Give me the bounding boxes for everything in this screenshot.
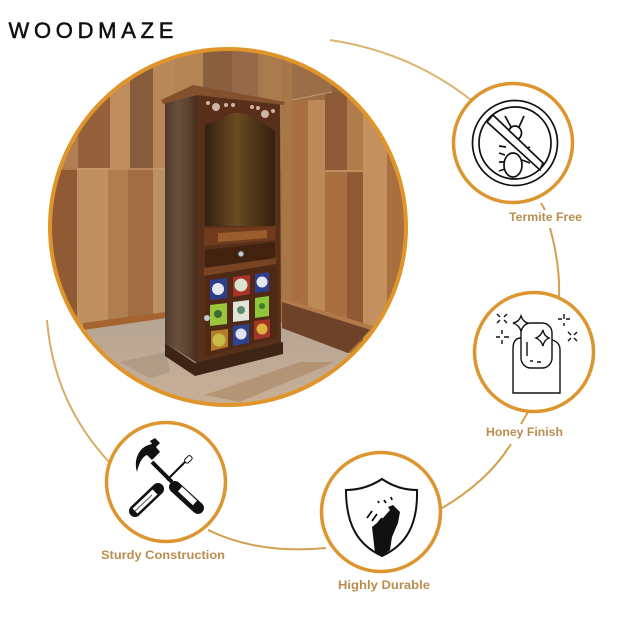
floor streaks [120,352,335,402]
icon: polished nail [496,314,577,393]
base plinth [165,342,283,376]
left wall lower planks [52,168,165,326]
baseboards [83,312,166,330]
photo ring [50,49,406,405]
feature: sturdy construction [101,422,226,562]
screwdriver handle [135,489,158,511]
ring [106,422,226,542]
door [205,264,277,356]
product photo circle [40,47,408,420]
hammer head [136,438,160,472]
icon: shield with fist [346,479,417,556]
right wall planks [62,64,387,342]
drawer niche and knob [205,242,275,270]
feature: honey finish [474,292,594,439]
shelf [204,226,276,246]
niche opening [205,113,275,226]
side panel [165,95,197,363]
title: WOODMAZE [8,18,178,43]
label: Honey Finish [486,427,563,439]
screwdriver shaft [167,460,187,480]
top cornice [161,85,285,105]
ring [454,84,572,202]
tiles [210,272,270,351]
feature: termite free [454,84,582,224]
label: Termite Free [509,212,582,224]
ring [322,452,440,572]
connector lines [47,40,559,549]
ring [474,292,594,412]
icon: no termite [472,100,558,186]
feature: highly durable [322,452,440,592]
label: Highly Durable [338,580,430,592]
left wall upper planks [62,51,282,170]
floor [85,318,351,403]
hammer handle [152,462,172,482]
icon: hammer and screwdriver [134,438,198,512]
door ring [204,315,210,321]
cabinet [161,85,285,376]
front panel [197,95,281,363]
label: Sturdy Construction [101,550,225,562]
arch carving [205,98,276,131]
